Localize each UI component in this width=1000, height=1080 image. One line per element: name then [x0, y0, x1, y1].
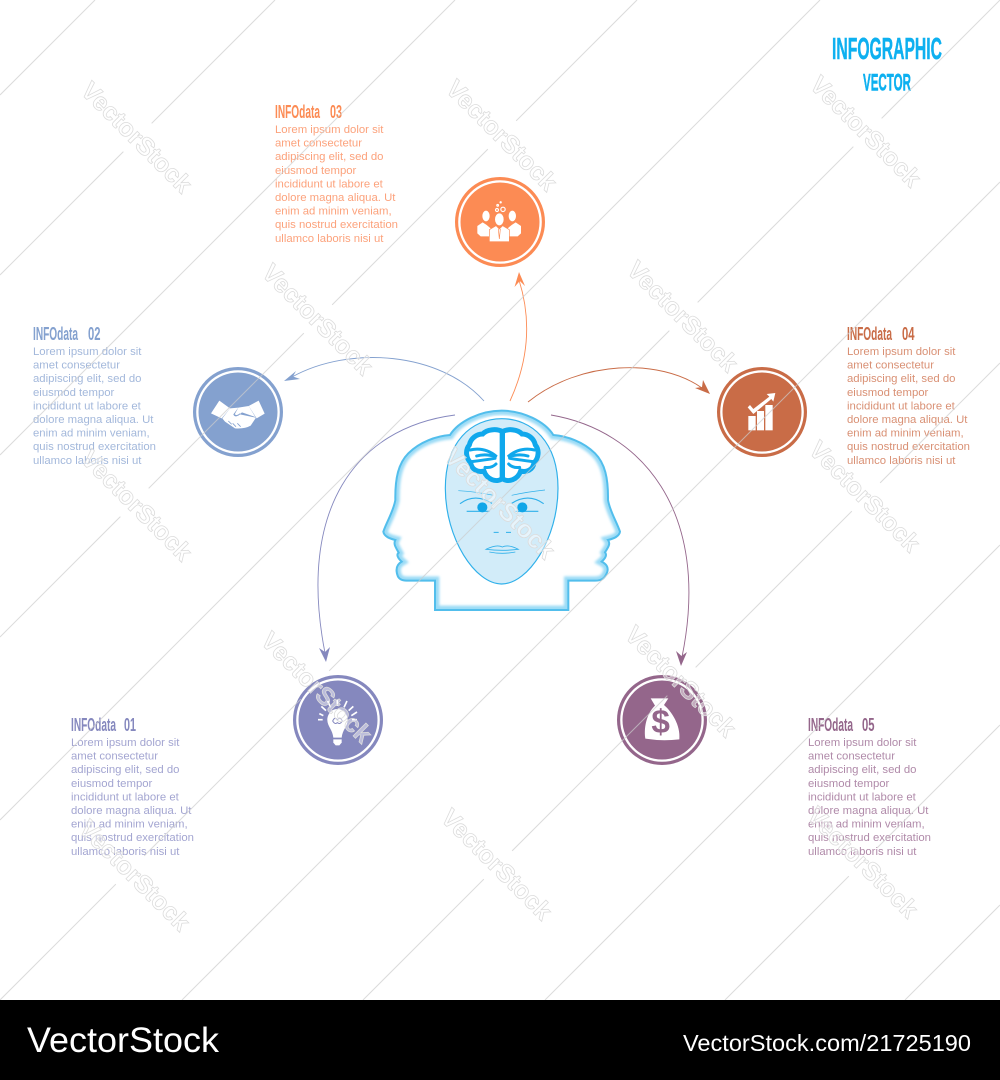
arrow: head to circle 01	[318, 415, 455, 662]
eyes and brows	[458, 490, 545, 553]
text block 03	[275, 102, 398, 245]
heads silhouette	[383, 411, 620, 610]
text block 02: incididunt ut labore et	[33, 400, 142, 412]
central illustration: heads and face	[383, 411, 620, 610]
text block 04: quis nostrud exercitation	[847, 441, 970, 453]
text block 05	[808, 715, 931, 858]
watermarks: VectorStock	[75, 445, 197, 567]
text block 03: INFOdata	[275, 102, 321, 122]
text block 04: INFOdata	[847, 324, 893, 344]
text block 05: adipiscing elit, sed do	[808, 764, 916, 776]
watermarks: VectorStock	[803, 436, 925, 558]
text block 03: adipiscing elit, sed do	[275, 151, 383, 163]
circle 01: light bulb	[295, 677, 381, 763]
watermarks: VectorStock	[621, 256, 743, 378]
watermarks: VectorStock	[440, 75, 562, 197]
text block 01: amet consectetur	[71, 751, 158, 763]
text block 05: ullamco laboris nisi ut	[808, 846, 917, 858]
icon: light bulb	[318, 699, 357, 745]
text block 04: adipiscing elit, sed do	[847, 373, 955, 385]
face	[443, 416, 561, 587]
title	[832, 31, 942, 96]
text block 04: dolore magna aliqua. Ut	[847, 414, 968, 426]
circle 02: handshake	[195, 369, 281, 455]
text block 01: Lorem ipsum dolor sit	[71, 737, 180, 749]
circle 05: money bag	[619, 677, 705, 763]
watermarks: VectorStock	[75, 77, 197, 199]
watermarks: VectorStock	[619, 621, 741, 743]
arrow: head to circle 05	[551, 415, 689, 666]
text block 03: ullamco laboris nisi ut	[275, 233, 384, 245]
text block 04: eiusmod tempor	[847, 387, 929, 399]
text block 03: enim ad minim veniam,	[275, 206, 392, 218]
text block 03: dolore magna aliqua. Ut	[275, 192, 396, 204]
title: VECTOR	[863, 70, 911, 96]
text block 02: adipiscing elit, sed do	[33, 373, 141, 385]
text block 02: Lorem ipsum dolor sit	[33, 346, 142, 358]
text block 05: dolore magna aliqua. Ut	[808, 805, 929, 817]
footer url: VectorStock.com/21725190	[683, 1030, 971, 1056]
text block 05: incididunt ut labore et	[808, 791, 917, 803]
watermarks: VectorStock	[804, 71, 926, 193]
icon: team with gears	[477, 202, 521, 242]
watermarks: VectorStock	[435, 804, 557, 926]
circle 03: team	[457, 179, 543, 265]
watermarks: VectorStock	[801, 802, 923, 924]
icon: money bag: $	[651, 704, 670, 741]
text block 04: ullamco laboris nisi ut	[847, 455, 956, 467]
text block 04: 04	[902, 324, 914, 344]
watermarks	[73, 71, 926, 937]
text block 01: eiusmod tempor	[71, 778, 153, 790]
text block 02: eiusmod tempor	[33, 387, 115, 399]
arrow: head to circle 03	[510, 272, 527, 401]
text block 01: enim ad minim veniam,	[71, 819, 188, 831]
text block 05: enim ad minim veniam,	[808, 819, 925, 831]
text block 04: enim ad minim veniam,	[847, 428, 964, 440]
footer bar	[0, 1000, 1000, 1080]
text block 05: quis nostrud exercitation	[808, 832, 931, 844]
text block 01	[71, 715, 194, 858]
text block 05: INFOdata	[808, 715, 854, 735]
text block 01: quis nostrud exercitation	[71, 832, 194, 844]
text block 02: dolore magna aliqua. Ut	[33, 414, 154, 426]
text block 02: INFOdata	[33, 324, 79, 344]
text block 03: 03	[330, 102, 342, 122]
watermarks: VectorStock	[438, 443, 560, 565]
text block 02: quis nostrud exercitation	[33, 441, 156, 453]
text block 05: Lorem ipsum dolor sit	[808, 737, 917, 749]
watermarks: VectorStock	[73, 815, 195, 937]
text block 01: dolore magna aliqua. Ut	[71, 805, 192, 817]
text block 01: ullamco laboris nisi ut	[71, 846, 180, 858]
text block 03: incididunt ut labore et	[275, 178, 384, 190]
text block 04	[847, 324, 970, 467]
text block 02: amet consectetur	[33, 360, 120, 372]
text block 04: amet consectetur	[847, 360, 934, 372]
text block 03: Lorem ipsum dolor sit	[275, 124, 384, 136]
text block 03: amet consectetur	[275, 138, 362, 150]
text block 05: 05	[862, 715, 874, 735]
text block 02: 02	[88, 324, 100, 344]
text block 01: 01	[124, 715, 136, 735]
icon: brain	[467, 430, 538, 481]
circle 04: growth chart	[719, 369, 805, 455]
watermarks: VectorStock	[256, 259, 378, 381]
text block 05: amet consectetur	[808, 751, 895, 763]
arrow: head to circle 04	[528, 368, 710, 402]
text block 04: Lorem ipsum dolor sit	[847, 346, 956, 358]
text block 02: ullamco laboris nisi ut	[33, 455, 142, 467]
icon: handshake	[211, 401, 265, 428]
text block 01: incididunt ut labore et	[71, 791, 180, 803]
footer logo: VectorStock	[27, 1021, 220, 1060]
text block 02: enim ad minim veniam,	[33, 428, 150, 440]
text block 04: incididunt ut labore et	[847, 400, 956, 412]
text block 01: INFOdata	[71, 715, 117, 735]
text block 01: adipiscing elit, sed do	[71, 764, 179, 776]
text block 03: quis nostrud exercitation	[275, 219, 398, 231]
text block 05: eiusmod tempor	[808, 778, 890, 790]
icon: bar chart with arrow	[748, 393, 775, 430]
text block 03: eiusmod tempor	[275, 165, 357, 177]
watermarks: VectorStock	[255, 627, 377, 749]
arrow: head to circle 02	[284, 358, 484, 401]
text block 02	[33, 324, 156, 467]
